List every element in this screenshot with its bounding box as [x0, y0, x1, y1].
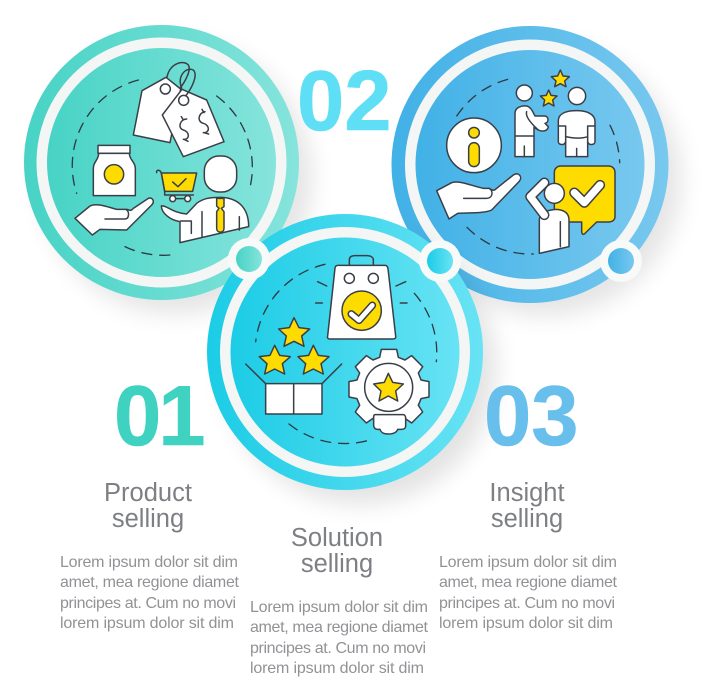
number 01: 01 — [114, 369, 206, 464]
text block: solution selling: principes at. Cum no movi — [250, 640, 426, 657]
heading: product selling: selling — [112, 505, 184, 533]
text block: solution selling: Lorem ipsum dolor sit dim — [250, 599, 428, 616]
text block: solution selling — [250, 599, 429, 677]
text block: solution selling: lorem ipsum dolor sit dim — [250, 660, 424, 677]
panel: insight selling circle — [392, 26, 681, 316]
text block: product selling: principes at. Cum no movi — [60, 595, 236, 612]
text block: product selling: Lorem ipsum dolor sit dim — [60, 554, 238, 571]
connector node: teal — [228, 238, 270, 280]
panel: product selling circle — [24, 25, 312, 314]
number 02: 02 — [297, 54, 392, 149]
text block: product selling: lorem ipsum dolor sit dim — [60, 615, 234, 632]
text block: insight selling: Lorem ipsum dolor sit dim — [439, 554, 617, 571]
heading: solution selling: Solution — [291, 524, 383, 552]
text block: product selling: amet, mea regione diamet — [60, 574, 240, 591]
connector node: blue — [600, 240, 642, 282]
heading: insight selling: selling — [491, 505, 563, 533]
icon: product selling illustration — [72, 63, 252, 255]
text block: product selling — [60, 554, 240, 632]
text block: insight selling: amet, mea regione diamet — [439, 574, 618, 591]
number 03: 03 — [484, 369, 579, 464]
heading: product selling: Product — [104, 479, 192, 507]
text block: insight selling — [439, 554, 618, 632]
icon: insight selling illustration — [437, 70, 620, 254]
icon: solution selling illustration — [246, 256, 437, 444]
text block: insight selling: lorem ipsum dolor sit dim — [439, 615, 613, 632]
text block: solution selling: amet, mea regione diamet — [250, 619, 429, 636]
panel: solution selling circle — [207, 214, 496, 504]
heading: solution selling: selling — [301, 550, 373, 578]
text block: insight selling: principes at. Cum no movi — [439, 595, 615, 612]
connector node: cyan — [419, 240, 461, 282]
heading: insight selling: Insight — [489, 479, 565, 507]
